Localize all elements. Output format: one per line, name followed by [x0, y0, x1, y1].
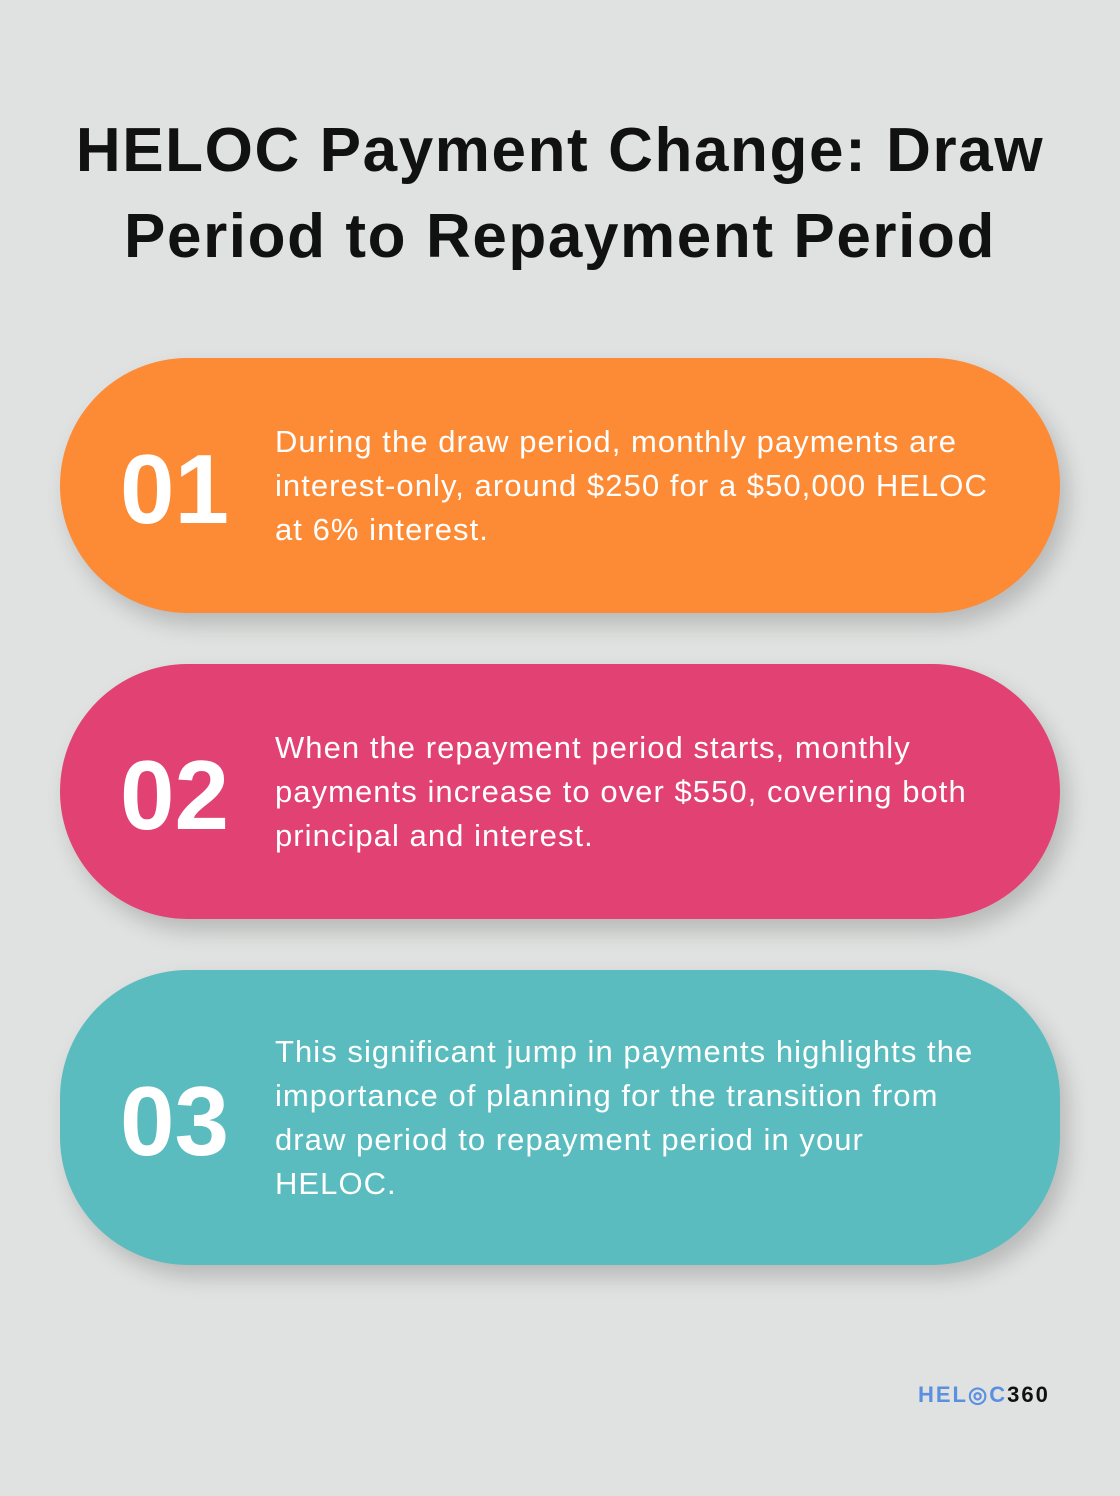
text 01: at 6% interest. [275, 512, 489, 547]
card 03 [60, 970, 1060, 1265]
text 02 [275, 730, 967, 853]
text 03: draw period to repayment period in your [275, 1122, 864, 1157]
text 03: This significant jump in payments highlights the [275, 1034, 973, 1069]
text 03: importance of planning for the transition from [275, 1078, 938, 1113]
text 01: interest-only, around $250 for a $50,000 HELOC [275, 468, 988, 503]
title: HELOC Payment Change: Draw [76, 116, 1044, 185]
logo: HEL◎C360 [918, 1382, 1050, 1407]
title [76, 116, 1044, 271]
number 02: 02 [120, 740, 229, 850]
text 01 [275, 424, 988, 547]
text 03 [275, 1034, 973, 1201]
card 01 [60, 358, 1060, 613]
number 03: 03 [120, 1066, 229, 1176]
title: Period to Repayment Period [124, 202, 996, 271]
text 01: During the draw period, monthly payments are [275, 424, 957, 459]
text 02: payments increase to over $550, covering both [275, 774, 967, 809]
text 03: HELOC. [275, 1166, 397, 1201]
text 02: principal and interest. [275, 818, 594, 853]
number 01: 01 [120, 434, 229, 544]
text 02: When the repayment period starts, monthly [275, 730, 911, 765]
card 02 [60, 664, 1060, 919]
